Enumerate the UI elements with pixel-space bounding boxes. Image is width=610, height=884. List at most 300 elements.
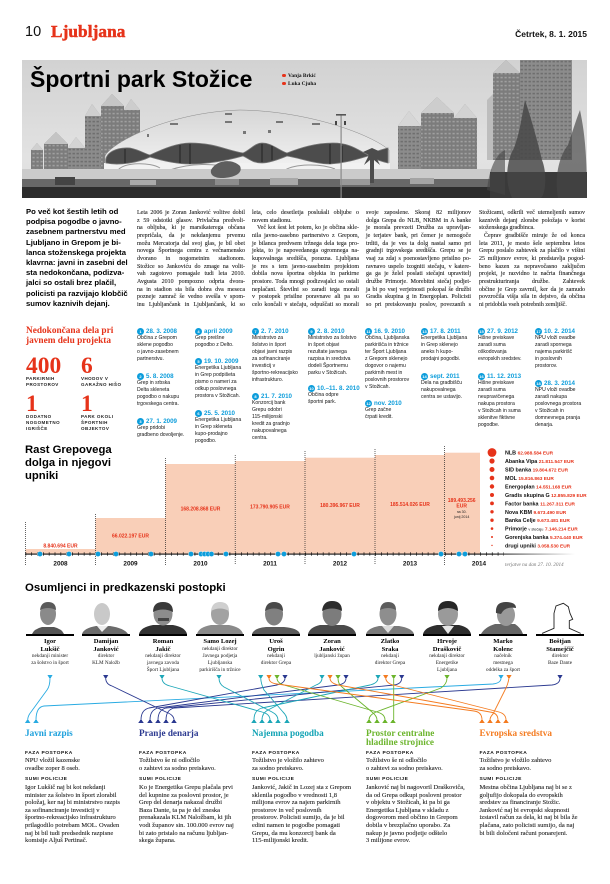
article column 1: pozneje zamrač še vedno svešla v spom- xyxy=(137,294,245,300)
event 11 xyxy=(365,328,410,390)
chart heading: Rast Grepovega xyxy=(25,444,112,456)
event 8: 21. 7. 2010 xyxy=(261,392,292,400)
text: zaradi suma xyxy=(478,342,506,348)
chart heading: upniki xyxy=(25,470,58,482)
link end markers xyxy=(25,675,563,723)
person: Zoran Janković xyxy=(308,601,356,659)
text: Grep preišne xyxy=(195,335,224,341)
lamp post xyxy=(335,114,346,198)
person: Marko Kolenc: Marko xyxy=(493,638,513,645)
article column 2: novem stadionu. xyxy=(252,218,292,224)
text: prodajni pogodbi. xyxy=(421,356,460,362)
article column 4: občine je Grep zavrnil, ker da je zamudo xyxy=(479,287,585,293)
panel: Pranje denarja: Baza Dante, ta pa je del zneska xyxy=(139,807,220,814)
article column 1: Stožice so Jankoviću do zmage na volit- xyxy=(137,264,245,270)
event 15 xyxy=(478,328,522,362)
heading: suspects: Osumljenci in predkazenski postopki xyxy=(25,582,226,594)
person: Boštjan Stamejčič: Stamejčič xyxy=(546,646,574,652)
article column 2: je bilanca predvsem tržnega dela tega pro- xyxy=(252,241,359,247)
person: Boštjan Stamejčič: Baze Dante xyxy=(548,660,572,666)
panel: Prostor centralne hladilne strojnice: Tožilstvo še ni odločilo xyxy=(366,757,427,764)
event 14: sept. 2011 xyxy=(430,372,460,380)
text: partnerstvu. xyxy=(137,356,164,362)
stat: 1 additional football pitch: IGRIŠČE xyxy=(26,426,48,431)
text: za sofinanciranje xyxy=(252,356,290,362)
text: poslovnega prostora xyxy=(535,401,581,407)
panel: Najemna pogodba: Janković, Jakič in Lozej sta z Grepom xyxy=(252,784,351,791)
text: Dela na gradbišču xyxy=(421,380,462,386)
stat: 1 additional football pitch: DODATNO xyxy=(26,414,52,419)
byline xyxy=(282,73,316,87)
person: Uroš Ogrin: Ogrin xyxy=(268,646,284,652)
text: dodeli Športnemu xyxy=(308,363,348,369)
stat: 1 park around sports facilities: OBJEKTOV xyxy=(81,426,109,431)
event 16: 16 xyxy=(479,374,484,378)
fence, parked cars and foreground xyxy=(22,169,587,198)
legend: creditors: MOL 15.816.863 EUR xyxy=(505,476,554,482)
panel: Prostor centralne hladilne strojnice: o zahtevi za sodno preiskavo. xyxy=(366,765,443,772)
article column 2 xyxy=(252,210,359,308)
article column 3: je terjatev bank, pri čemer je nemogoče xyxy=(366,233,471,239)
panel: Prostor centralne hladilne strojnice: nakup je javno podjetje odštelo xyxy=(366,830,447,837)
stat: 1 additional football pitch xyxy=(26,391,60,431)
text: prostora v Stožicah. xyxy=(195,393,240,399)
event 18: 28. 3. 2014 xyxy=(544,380,575,386)
legend: creditors xyxy=(488,448,587,549)
panel: Evropska sredstva: Mestna občina Ljubljana naj bi se z xyxy=(480,784,572,791)
person: Roman Jakič xyxy=(139,602,187,673)
lead paragraph: Po več kot šestih letih od xyxy=(26,207,118,216)
text: centra se ustavijo. xyxy=(421,394,462,400)
text: Ministrstvo za xyxy=(252,335,283,341)
text: Občina, Ljubljanska xyxy=(365,335,409,341)
panel: Najemna pogodba: 115-milijonski kredit. xyxy=(252,837,308,844)
event 1: 28. 3. 2008 xyxy=(146,328,177,334)
person: Roman Jakič: Šport Ljubljana xyxy=(147,667,179,673)
source note: terjatve na dan 27. 10. 2014 xyxy=(505,561,564,568)
event 14: 14 xyxy=(422,374,427,378)
lead paragraph: klavrna: javni in zasebni del xyxy=(26,258,128,267)
debt amount labels xyxy=(43,498,476,550)
article column 4: stoženskega gradbinca. xyxy=(479,225,535,231)
text: rezultate javnega xyxy=(308,349,347,355)
event 11: 16. 9. 2010 xyxy=(374,328,405,334)
article column 3: trditi, da je ves ta dolg nastal samo pri xyxy=(366,241,471,247)
event 12: nov. 2010 xyxy=(374,400,402,406)
person: Samo Lozej: parkirišča in tržnice xyxy=(199,666,241,672)
legend: creditors: SID banka 19.804.672 EUR xyxy=(505,468,569,474)
panel: Evropska sredstva: plačana, zato policisti sumijo, da naj xyxy=(480,822,574,829)
byline: Luka Cjuha xyxy=(288,81,316,87)
text: Grep pridobi xyxy=(137,425,165,431)
legend: creditors: Nova KBM 9.673.490 EUR xyxy=(505,510,567,516)
panel: Prostor centralne hladilne strojnice: Janković naj bi nagovoril Draškoviča, xyxy=(366,784,465,791)
panel: Evropska sredstva: FAZA POSTOPKA xyxy=(480,751,527,756)
debt amount labels: 173.790.905 EUR xyxy=(250,504,290,510)
text: NPU vloži ovadbe xyxy=(535,335,576,341)
text: in Grep skleneta xyxy=(195,424,232,430)
panel: Pranje denarja: Ko je Energetika Grepu plačala prvi xyxy=(139,784,233,791)
person: Roman Jakič: nekdanji direktor xyxy=(145,653,181,659)
text: neupravičenega xyxy=(478,394,514,400)
panel: Pranje denarja: FAZA POSTOPKA xyxy=(139,751,187,756)
person: Samo Lozej: Samo Lozej xyxy=(203,638,237,645)
legend: creditors: drugi upniki 3.058.530 EUR xyxy=(505,543,571,549)
text: trgovskega centra. xyxy=(137,401,179,407)
panel: Prostor centralne hladilne strojnice: Prostor centralne xyxy=(366,728,434,738)
text: športni park. xyxy=(308,399,336,405)
person: Samo Lozej: Ljubljanska xyxy=(208,660,232,666)
article column 4: povzročila višja sila in dejstvo, da občina xyxy=(479,294,585,300)
panel: Pranje denarja: del kupnine za poslovni prostor, je xyxy=(139,792,229,799)
event 5: 19. 10. 2009 xyxy=(204,358,238,364)
heading: unfinished works: Nedokončana dela pri xyxy=(26,326,113,336)
event 4: april 2009 xyxy=(204,328,233,334)
panel: Najemna pogodba: prostorov. Policisti sumijo, da je bil xyxy=(252,814,345,821)
text: sklenitve fiktivne xyxy=(478,415,515,421)
article column 3: Gradis skupina g in Energoplan. Policisti xyxy=(366,294,471,300)
year labels: 2011 xyxy=(263,560,277,568)
event 18 xyxy=(535,380,582,428)
lead paragraph: zasebnem partnerstvu med xyxy=(26,227,126,236)
text: pogodbo z Delto. xyxy=(195,342,234,348)
links: Evropska sredstva xyxy=(269,678,509,720)
legend: creditors: Banka Celje 9.673.481 EUR xyxy=(505,518,570,524)
person: Roman Jakič: Roman xyxy=(153,638,173,645)
debt amount labels: 168.208.868 EUR xyxy=(181,506,221,512)
legend: creditors: Abanka Vipa 21.811.547 EUR xyxy=(505,459,575,465)
lead paragraph: sta nedokončana, podizva- xyxy=(26,268,124,277)
article column 2: neplačani. Številni so zaradi tega morali xyxy=(252,287,359,293)
article column 2: v postopek prisilne poravnave ali pa so xyxy=(252,294,359,300)
panel: Javni razpis: naj bi bil tudi predsednik razpisne xyxy=(25,830,113,837)
legend: creditors: NLB 62.988.584 EUR xyxy=(505,450,554,456)
panel: Evropska sredstva: Tožilstvo je vložilo zahtevo xyxy=(480,757,551,764)
article column 3: svoje zaposlene. Skoraj 82 milijonov xyxy=(366,210,471,216)
event 10: 10.–11. 8. 2010 xyxy=(317,384,360,392)
panel: Pranje denarja: Pranje denarja xyxy=(139,728,198,738)
event 11: 11 xyxy=(366,328,371,334)
panel: Pranje denarja: bi zato pristalo na računu ljubljan- xyxy=(139,830,228,837)
panel: Javni razpis: SUMI POLICIJE xyxy=(25,777,67,782)
year labels xyxy=(53,560,487,568)
article column 2: celo končali v stečaju, odpuščati so morali xyxy=(252,302,359,308)
event 12 xyxy=(365,400,402,420)
panel: Najemna pogodba xyxy=(252,729,360,859)
text: infrastrukturo. xyxy=(252,377,283,383)
event 16: 11. 12. 2013 xyxy=(487,372,521,380)
article column 4: ni pridobila vseh potrebnih zemljišč. xyxy=(479,302,567,308)
panel: Evropska sredstva: Evropska sredstva xyxy=(480,728,552,738)
text: objavi javni razpis xyxy=(252,349,292,355)
text: pogodbe. xyxy=(478,422,499,428)
person: Igor Lukšič xyxy=(26,602,74,666)
towers left small xyxy=(31,132,85,170)
panel: Najemna pogodba: Grepu, da mu konzorcij bank da xyxy=(252,830,336,837)
event 18: 18 xyxy=(536,380,541,386)
panel: Prostor centralne hladilne strojnice: Energetika Ljubljana v skladu z xyxy=(366,807,449,814)
event 5: 5 xyxy=(197,358,200,364)
legend: creditors: Gradis skupina G 12.855.829 EUR xyxy=(505,493,587,499)
event 9: 2. 8. 2010 xyxy=(317,328,345,334)
person: Hrvoje Draškovič: nekdanji direktor xyxy=(429,653,465,659)
year labels: 2008 xyxy=(53,560,68,568)
article column 4: projekt, je razvidno iz načrta finančnega xyxy=(479,271,585,277)
panel: Javni razpis: komisije Aljuš Pertinač. xyxy=(25,837,87,844)
article column 3: ravnavo uspelo izogniti stečaju, v katere- xyxy=(366,264,471,270)
panel: Prostor centralne hladilne strojnice: hladilne strojnice xyxy=(366,737,434,747)
event 4: 4 xyxy=(197,328,200,334)
event 9 xyxy=(308,328,356,376)
event 9: 9 xyxy=(310,328,313,334)
event 15: 27. 9. 2012 xyxy=(487,328,518,334)
event 13: 17. 8. 2011 xyxy=(430,328,461,334)
article column 3: dolga Grepa do NLB, NKBM in A banke xyxy=(366,218,471,224)
stat: 6 garage entrances: 6 xyxy=(81,353,93,379)
person: Igor Lukšič: Igor xyxy=(44,638,56,645)
panel: Najemna pogodba: edini namen te pogodbe pomagati xyxy=(252,822,340,829)
connector diagram: suspects to proceedings xyxy=(0,670,610,726)
text: Energetika Ljubljana xyxy=(195,417,241,423)
event 13: 13 xyxy=(422,328,427,334)
person: Zlatko Sraka: Sraka xyxy=(382,646,398,652)
note on 2014 bar: na 30. xyxy=(457,510,467,514)
panel: Najemna pogodba: milijona evrov za najem parkirnih xyxy=(252,799,340,806)
panel: Evropska sredstva: goljufijo dokopala do evropskih xyxy=(480,792,563,799)
event 10 xyxy=(308,384,360,405)
panel: Prostor centralne hladilne strojnice: v objektu v Stožicah, ki pa bi ga xyxy=(366,799,450,806)
text: pogodbo. xyxy=(195,438,216,444)
person: Damijan Janković: direktor xyxy=(98,653,114,659)
event 4 xyxy=(195,328,234,348)
debt amount labels: 66.022.197 EUR xyxy=(112,534,149,540)
panel: Najemna pogodba: Najemna pogodba xyxy=(252,728,324,738)
article column 3: družbe Primorje. Morebitni stečaj podjet- xyxy=(366,279,471,285)
text: parkirišča in tržnice xyxy=(365,342,409,348)
person: Marko Kolenc: Kolenc xyxy=(493,646,513,652)
text: in Grep podpišeta xyxy=(195,372,235,378)
article column 1: novega Športnega centra z večnamensko xyxy=(137,248,245,254)
panel: Pranje denarja: Grep del denarja nakazal družbi xyxy=(139,799,222,806)
text: v Stožicah. xyxy=(365,384,390,390)
article column 3 xyxy=(366,210,471,308)
event 13 xyxy=(421,328,468,362)
text: razpisa in sredstva xyxy=(308,356,350,362)
text: črpati kredit. xyxy=(365,414,393,420)
chart heading xyxy=(25,444,112,482)
event 3: 3 xyxy=(139,418,142,424)
text: Hišne preiskave xyxy=(478,335,514,341)
text: Občina z Grepom xyxy=(137,335,177,341)
debt amount labels: 185.514.026 EUR xyxy=(390,502,430,508)
links: Javni razpis xyxy=(28,678,501,720)
person: Igor Lukšič: nekdanji minister xyxy=(32,653,68,659)
article column 4: prestrukturiranja družbe. Zahtevek xyxy=(479,279,585,285)
legend: creditors: Energoplan 14.551.168 EUR xyxy=(505,484,572,490)
article column 4: Čeprav gradbišče miruje že od konca xyxy=(484,233,585,239)
debt chart xyxy=(25,446,587,568)
links: Prostor centralne hladilne strojnice xyxy=(277,678,447,720)
article column 1: inu Ljubljančank in Ljubljančank, ki so xyxy=(137,302,245,308)
byline: Vanja Brkić xyxy=(288,73,316,79)
note on 2014 bar xyxy=(453,510,469,519)
legend: creditors: Factor banka 11.267.311 EUR xyxy=(505,501,576,507)
note on 2014 bar: junij 2014 xyxy=(453,515,469,519)
event 16 xyxy=(478,372,521,428)
text: šolstvo in šport xyxy=(252,342,286,348)
article column 4: Stožicami, odkrili več utemeljenih sumov xyxy=(479,210,585,216)
legend: creditors: Primorje v stečaju 7.146.214 EUR xyxy=(505,527,578,533)
text: nakupa prostora xyxy=(478,401,515,407)
person: Marko Kolenc: oddelka za šport xyxy=(486,667,520,673)
event 6 xyxy=(195,410,242,444)
event 6: 25. 5. 2010 xyxy=(204,410,235,416)
person: Damijan Janković xyxy=(82,603,130,666)
event 15: 15 xyxy=(479,328,484,334)
year labels: 2010 xyxy=(193,560,208,568)
stat: 1 park around sports facilities: ŠPORTNIH xyxy=(81,420,108,425)
text: pismo o nameri za xyxy=(195,379,237,385)
article column 3: vsaj za zdaj s poenostavljeno prisilno po- xyxy=(366,256,471,262)
text: aneks h kupo- xyxy=(421,349,453,355)
panel: Najemna pogodba: sklenila pogodbo v vrednosti 1,8 xyxy=(252,792,337,799)
panel: Evropska sredstva xyxy=(480,729,588,859)
article column 1: prepričala, da je nekdanjemu prvemu xyxy=(137,233,245,239)
text: kupo-prodajno xyxy=(195,431,228,437)
panel: Prostor centralne hladilne strojnice: dobila v brezplačno uporabo. Za xyxy=(366,822,450,829)
text: zaradi nakupa xyxy=(535,394,567,400)
panel: Najemna pogodba: SUMI POLICIJE xyxy=(252,777,294,782)
year labels: 2012 xyxy=(333,560,348,568)
article column 3: ja bi po vsej verjetnosti pokopal še družbi xyxy=(366,287,471,293)
lead paragraph: jalci so ostali brez plačil, xyxy=(26,278,116,287)
article column 4: kaznivih dejanj zlorabe položaja v korist xyxy=(479,218,585,224)
panel: Evropska sredstva: SUMI POLICIJE xyxy=(480,777,522,782)
title: Športni park Stožice xyxy=(30,66,252,92)
person: Uroš Ogrin xyxy=(252,602,300,666)
event 1: 1 xyxy=(139,328,142,334)
lead paragraph: policisti pa razvijajo klobčič xyxy=(26,289,128,298)
person: Uroš Ogrin: Uroš xyxy=(269,638,283,645)
panel: Prostor centralne hladilne strojnice: da od Grepa odkupi poslovni prostor xyxy=(366,792,462,799)
stat: 1 park around sports facilities: PARK OKOLI xyxy=(81,414,113,419)
person: Zlatko Sraka: direktor Grepa xyxy=(375,660,405,666)
panel: Najemna pogodba: za sodno preiskavo. xyxy=(252,765,303,772)
stat: 1 additional football pitch: NOGOMETNO xyxy=(26,420,60,425)
panel: Prostor centralne hladilne strojnice: dogovorom med občino in Grepom xyxy=(366,814,458,821)
legend: creditors: Gorenjska banka 5.374.440 EUR xyxy=(505,535,583,541)
event 5 xyxy=(195,358,242,399)
person: Zoran Janković: ljubljanski župan xyxy=(314,653,350,659)
person: Zoran Janković: Zoran xyxy=(323,638,341,645)
lead paragraph: sumov kaznivih dejanj. xyxy=(26,299,110,308)
person: Samo Lozej: nekdanji direktor xyxy=(202,646,238,652)
article column 2: leta, celo desetletja poslušali obljube o xyxy=(252,210,359,216)
text: odkup poslovnega xyxy=(195,386,236,392)
event 17 xyxy=(535,328,576,369)
year labels: 2013 xyxy=(403,560,418,568)
text: domnevnega pranja xyxy=(535,415,580,421)
lead paragraph: Ljubljano in Grepom je bi- xyxy=(26,238,121,247)
person: Hrvoje Draškovič: Hrvoje xyxy=(437,638,457,645)
person: Marko Kolenc xyxy=(479,600,527,678)
person: Hrvoje Draškovič: Draškovič xyxy=(433,646,461,652)
person: Zlatko Sraka: nekdanji xyxy=(381,653,399,659)
hero photo: Stožice arena and tower blocks xyxy=(22,60,587,198)
panel: Prostor centralne hladilne strojnice: SUMI POLICIJE xyxy=(366,777,408,782)
panel: Pranje denarja: Tožilstvo še ni odločilo xyxy=(139,757,200,764)
text: Občina odpre xyxy=(308,392,339,398)
person: Igor Lukšič: Lukšič xyxy=(40,646,60,652)
event 2: 5. 8. 2008 xyxy=(146,372,174,380)
panel: Javni razpis: prilagodilo potrebam MOL. Ovaden xyxy=(25,822,119,829)
text: poslovnih prostorov xyxy=(365,377,409,383)
event 2 xyxy=(137,372,179,407)
person: Marko Kolenc: načelnik xyxy=(494,653,512,659)
event 1 xyxy=(137,328,179,362)
heading: unfinished works: javnem delu projekta xyxy=(26,336,111,346)
person: Boštjan Stamejčič: Boštjan xyxy=(549,638,571,645)
panel: Javni razpis: NPU vložil kazenske xyxy=(25,757,80,764)
text: najema parkirišč xyxy=(535,349,572,355)
person: Boštjan Stamejčič: direktor xyxy=(552,653,568,659)
debt amount labels: 189.493.256 xyxy=(448,498,476,504)
person: Damijan Janković: Janković xyxy=(93,646,119,652)
article column 1: dvorano in nogometnim stadionom. xyxy=(137,256,245,262)
text: parku v Stožicah. xyxy=(308,370,347,376)
text: Energetika Ljubljana xyxy=(195,365,241,371)
panel: Javni razpis: položaj, ker naj bi ministrstvo razpis xyxy=(25,799,120,806)
article column 2: je res s tem javno-zasebnim projektom xyxy=(252,264,359,270)
person: Marko Kolenc: mestnega xyxy=(493,660,513,666)
stat: 1 park around sports facilities: 1 xyxy=(81,391,93,417)
panel: Najemna pogodba: FAZA POSTOPKA xyxy=(252,751,300,756)
article column 1: vah zagotovo pomagale tudi leta 2010. xyxy=(137,271,245,277)
person: Zlatko Sraka xyxy=(366,602,414,666)
text: 115-milijonski xyxy=(252,414,282,420)
panel: Javni razpis: športno-rekreacijsko infrastrukturo xyxy=(25,814,116,821)
person: Hrvoje Draškovič: Ljubljana xyxy=(437,667,457,673)
text: in Grep sklenejo xyxy=(421,342,458,348)
article column 1: Leta 2006 je Zoran Janković volitve dobil xyxy=(137,210,245,216)
event 6: 6 xyxy=(197,410,200,416)
event 2: 2 xyxy=(139,374,142,378)
event 14 xyxy=(421,372,462,400)
text: zaradi spornega xyxy=(535,342,572,348)
panel: Najemna pogodba: prostorov in več poslovnih xyxy=(252,807,322,814)
panel: Pranje denarja: SUMI POLICIJE xyxy=(139,777,181,782)
person: Hrvoje Draškovič xyxy=(423,601,471,673)
event 17: 10. 2. 2014 xyxy=(544,328,575,334)
text: Delta skleneta xyxy=(137,387,169,393)
person: Damijan Janković: KLM Naložb xyxy=(92,660,120,666)
timeline event markers xyxy=(37,551,468,557)
date: Četrtek, 8. 1. 2015 xyxy=(515,29,587,39)
article column 4: 25 milijonov evrov, ki predstavlja pogod- xyxy=(479,256,585,262)
article column 2: dobila nova športna objekta in parkirne xyxy=(252,271,359,277)
text: NPU vloži ovadbe xyxy=(535,387,576,393)
stat: 6 garage entrances: VHODOV V xyxy=(81,376,108,381)
year labels: 2009 xyxy=(123,560,138,568)
event 8 xyxy=(252,392,292,441)
links: Najemna pogodba xyxy=(162,678,378,720)
stat: 400 parking spaces: PROSTOROV xyxy=(26,382,59,387)
article column 3: gradnji trgovskega središča. Grepu se je xyxy=(366,248,471,254)
panel: Pranje denarja xyxy=(139,729,247,859)
palm and small trees xyxy=(211,148,381,183)
year labels: 2014 xyxy=(472,560,487,568)
lead paragraph: lanca stoženskega projekta xyxy=(26,248,126,257)
